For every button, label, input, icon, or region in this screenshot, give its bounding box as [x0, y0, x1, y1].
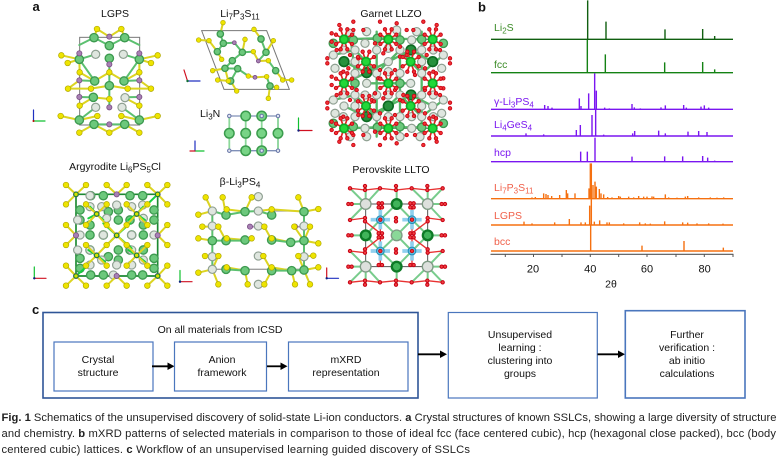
pattern: bcc [491, 225, 733, 251]
pattern: Li2S [491, 0, 733, 39]
crystal: LGPS [61, 29, 158, 133]
label: Li4GeS4: 4 [502, 124, 507, 132]
title: Li7P3S11: S [244, 8, 251, 20]
label: gamma-Li3PS4: PS [515, 96, 529, 108]
label: Li4GeS4: Li [494, 119, 502, 131]
title: beta-Li3PS4: β-Li [220, 176, 237, 188]
x axis: 80 [698, 264, 711, 276]
box: crystal structure [54, 342, 153, 391]
label: Li2S: S [507, 22, 514, 34]
box: further verification [625, 311, 745, 398]
box: unsupervised learning: learning : [498, 342, 542, 354]
panel c: workflow [32, 302, 745, 398]
box: anion framework: Anion [209, 354, 236, 366]
title: Argyrodite Li6PS5Cl: Cl [151, 161, 161, 173]
crystal: Argyrodite [66, 185, 167, 286]
outer box: all materials from ICSD [43, 312, 418, 398]
x axis: 40 [584, 264, 596, 276]
pattern: Li7P3S11 [491, 163, 733, 199]
title: LGPS: LGPS [101, 8, 129, 20]
label: hcp: hcp [494, 147, 511, 159]
label: fcc: fcc [494, 59, 507, 71]
crystal: beta-Li3PS4 [198, 197, 318, 284]
label: LGPS: LGPS [494, 210, 522, 222]
box: unsupervised learning: Unsupervised [488, 329, 552, 341]
title: Li7P3S11: 7 [228, 12, 233, 22]
title: Li3N: N [213, 108, 220, 120]
title: Li3N: Li [200, 108, 208, 120]
panel b: mXRD patterns [478, 0, 733, 290]
title: Garnet LLZO: Garnet LLZO [360, 8, 422, 20]
outer box: all materials from ICSD: On all materials from ICSD [158, 324, 283, 336]
axes: beta-Li3PS4 [179, 270, 192, 283]
label: gamma-Li3PS4: 3 [511, 100, 516, 110]
x axis [491, 254, 733, 290]
title: Argyrodite Li6PS5Cl: Argyrodite Li [69, 161, 128, 173]
title: Li3N: 3 [208, 112, 213, 122]
box: mXRD representation: mXRD [331, 354, 362, 366]
axes: Garnet LLZO [297, 118, 312, 132]
box: crystal structure: Crystal [82, 354, 114, 366]
title: Li7P3S11: P [233, 8, 240, 20]
label: Li4GeS4: GeS [507, 119, 528, 131]
title: Perovskite LLTO: Perovskite LLTO [352, 164, 430, 176]
title: beta-Li3PS4: 3 [237, 180, 242, 190]
figure caption [2, 412, 776, 456]
crystal: Garnet LLZO [327, 22, 450, 145]
pattern: gamma-Li3PS4 [491, 73, 733, 109]
axes: Li7P3S11 [184, 70, 200, 82]
title: Argyrodite Li6PS5Cl: 5 [147, 166, 152, 174]
figure caption: Fig. 1 Schematics of the unsupervised discovery of solid-state Li-ion conductors. a Crystal structures of known SSLCs, showing a large diversity of structure [2, 412, 776, 424]
label: gamma-Li3PS4: γ-Li [494, 96, 511, 108]
pattern: hcp [491, 138, 733, 162]
label: gamma-Li3PS4: 4 [529, 100, 534, 110]
title: Li7P3S11: 3 [240, 12, 245, 22]
title: beta-Li3PS4: PS [242, 176, 256, 188]
label: Li7P3S11: 7 [502, 186, 507, 196]
label: Li4GeS4: 4 [528, 124, 533, 132]
box: anion framework: framework [197, 367, 247, 379]
title: beta-Li3PS4: 4 [256, 180, 261, 190]
x axis: 2θ [605, 278, 617, 290]
label: Li7P3S11: 3 [514, 186, 519, 196]
x axis: 60 [641, 264, 653, 276]
box: unsupervised learning [448, 312, 597, 398]
box: crystal structure: structure [78, 367, 119, 379]
arrow: to further verification [598, 350, 625, 358]
axes: LGPS [32, 110, 45, 122]
label: bcc: bcc [494, 236, 510, 248]
label: Li7P3S11: 11 [525, 186, 534, 196]
axes: Perovskite LLTO [326, 268, 338, 279]
arrow: to unsupervised learning [418, 350, 447, 358]
axes: Argyrodite [33, 267, 46, 279]
box: mXRD representation [288, 342, 408, 391]
title: Li7P3S11: 11 [251, 12, 260, 22]
figure caption: centered cubic) lattices. c Workflow of an unsupervised learning guided discovery of SSLCs [2, 444, 470, 456]
crystal: Li3N [229, 116, 278, 151]
box: unsupervised learning: clustering into [488, 355, 553, 367]
figure caption: and chemistry. b mXRD patterns of selected materials in comparison to those of ideal fcc (face centered cubic), hcp (hexagonal close packed), bcc (body [2, 428, 776, 440]
pattern: fcc [491, 40, 733, 73]
label: Li7P3S11: Li [494, 182, 502, 194]
pattern: LGPS [491, 199, 733, 225]
label: Li7P3S11: P [507, 182, 514, 194]
axes: Li3N [190, 141, 204, 151]
box: further verification: verification : [659, 342, 715, 354]
box: further verification: ab initio [669, 355, 705, 367]
title: Argyrodite Li6PS5Cl: 6 [128, 166, 133, 174]
box: anion framework [174, 342, 266, 391]
x axis: 20 [527, 264, 539, 276]
arrow: anion to mXRD [267, 362, 288, 370]
title: Li7P3S11: Li [220, 8, 228, 20]
panel label c: c [32, 302, 39, 317]
box: mXRD representation: representation [312, 367, 380, 379]
title: Argyrodite Li6PS5Cl: PS [133, 161, 147, 173]
label: Li2S: 2 [502, 26, 507, 36]
box: unsupervised learning: groups [504, 368, 536, 380]
crystal: Li7P3S11 [199, 23, 292, 98]
pattern: Li4GeS4 [491, 110, 733, 136]
box: further verification: calculations [660, 368, 714, 380]
label: Li2S: Li [494, 22, 502, 34]
crystal: Perovskite LLTO [348, 186, 445, 285]
arrow: crystal to anion [152, 362, 174, 370]
box: further verification: Further [670, 329, 704, 341]
panel a: crystal structures [32, 0, 450, 286]
label: Li7P3S11: S [518, 182, 525, 194]
